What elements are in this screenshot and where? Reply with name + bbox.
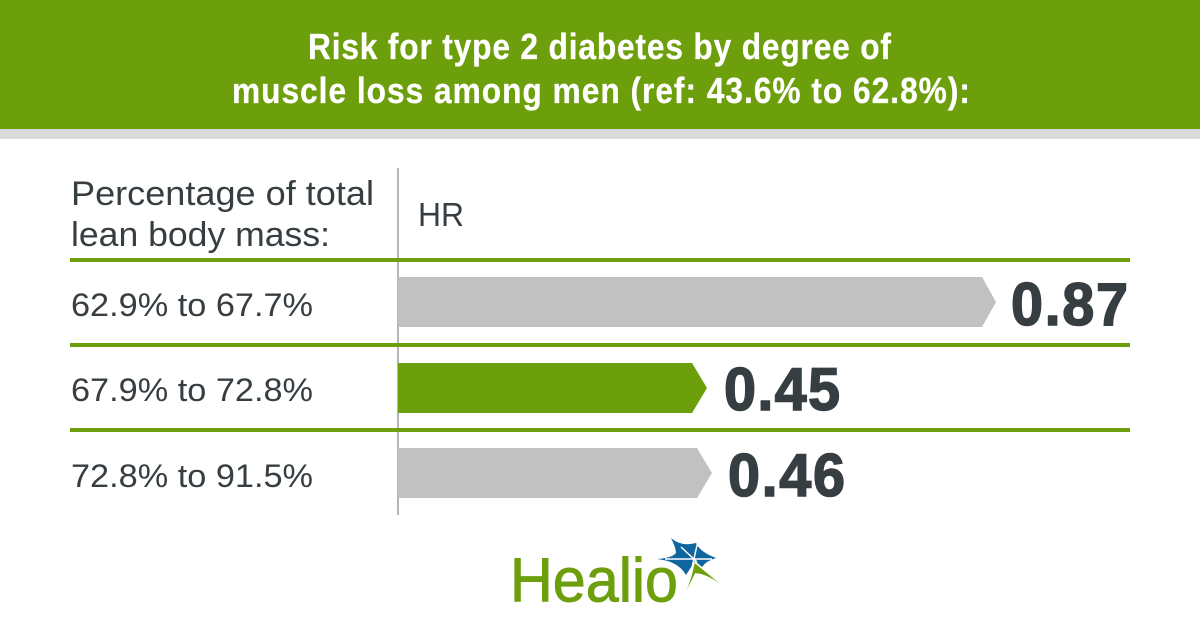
row 2 label: 67.9% to 72.8% [71,372,313,408]
row 2 value: 0.45 [724,357,840,423]
title [232,27,970,111]
row 2 [71,357,840,423]
row 3 bar [398,448,712,498]
row 1 value: 0.87 [1011,272,1128,338]
Healio logo [510,538,719,616]
row 3 label: 72.8% to 91.5% [71,458,313,494]
column heading: percentage of total lean body mass: Percentage of total [71,175,374,213]
row 1 bar [398,277,996,327]
column heading: percentage of total lean body mass: lean body mass: [71,216,330,254]
row 1 label: 62.9% to 67.7% [71,287,313,323]
logo star [657,538,719,590]
row 2 bar [398,363,707,413]
row 3 value: 0.46 [728,443,845,509]
column heading: percentage of total lean body mass [71,175,374,254]
row 3 [71,443,845,509]
logo wordmark: Healio [510,546,678,616]
title: Risk for type 2 diabetes by degree of [308,27,892,67]
title: muscle loss among men (ref: 43.6% to 62.8%): [232,71,970,111]
column heading: HR: HR [418,196,464,233]
row 1 [71,272,1128,338]
header band [0,0,1200,139]
